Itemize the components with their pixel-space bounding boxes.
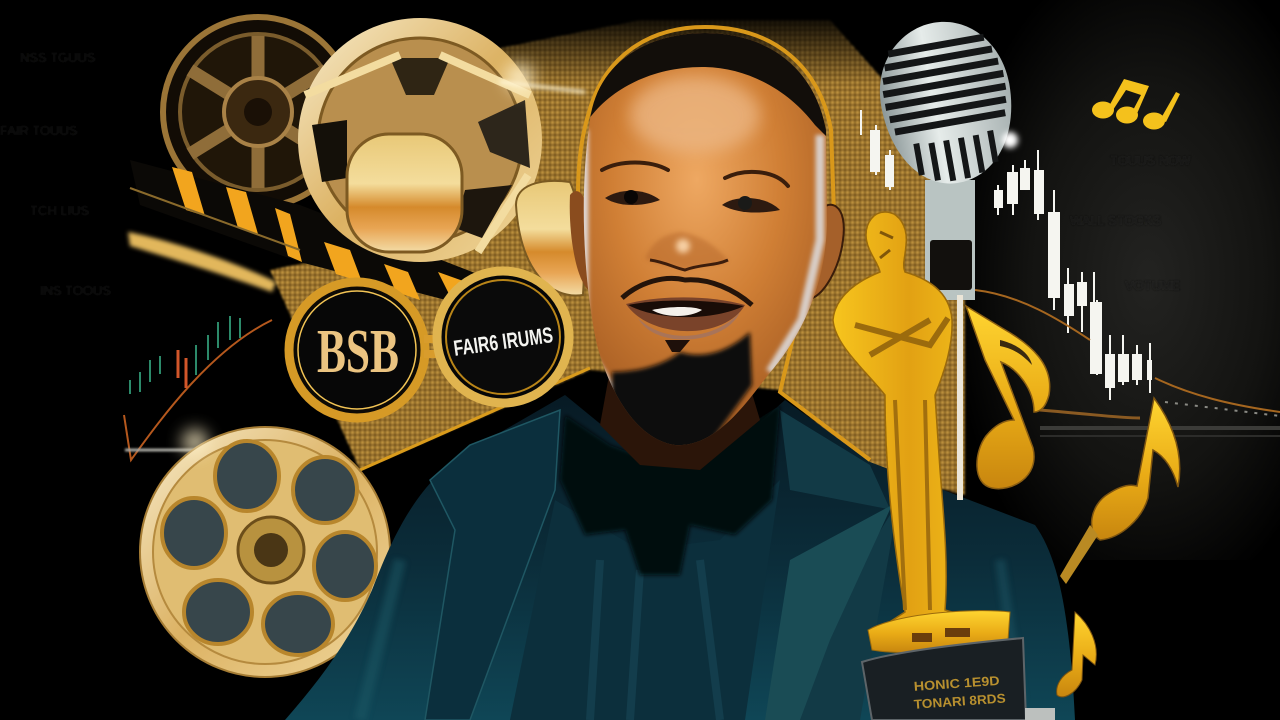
badge: BSB: BSB: [317, 318, 399, 386]
figure: moustache and mouth: [622, 278, 752, 352]
figure: eyebrows: [602, 162, 788, 186]
award statuette: [833, 212, 985, 635]
connector between badges: [424, 335, 438, 358]
icon: small music notes: [1092, 79, 1180, 130]
ghost text: faint market labels: [0, 50, 1191, 298]
figure: gold head outline: [578, 27, 870, 460]
badge: BSB: [289, 282, 425, 418]
gold film reel with lens: [298, 18, 585, 296]
figure: bow tie: [560, 405, 780, 575]
small candlestick chart, left: [124, 316, 272, 460]
ghost text: faint market labels: NSS TGUUS: [20, 50, 96, 65]
ghost text: faint market labels: TOUUS NOW: [1110, 153, 1191, 168]
figure: face: [584, 33, 827, 446]
microphone: [869, 12, 1025, 500]
ghost text: faint market labels: FAIR TOUUS: [0, 123, 78, 138]
dark film reel, top left: [163, 17, 353, 207]
ghost text: faint market labels: TCH LIUS: [30, 203, 90, 218]
badge: film text: [437, 271, 569, 403]
figure: ears: [570, 191, 844, 300]
candlestick chart, right: [861, 110, 1152, 400]
award base: [862, 611, 1055, 720]
award base: HONIC 1E9D: [913, 673, 1000, 694]
ghost text: faint market labels: VOTUME: [1125, 278, 1181, 293]
badge: film text: FAIR6 IRUMS: [452, 322, 554, 361]
background: dark vignette panel: [950, 0, 1280, 560]
figure: suit jacket: [285, 395, 1075, 720]
clapperboard stripe band: [130, 160, 480, 305]
background: gold halftone field: [270, 15, 965, 495]
light streak: [128, 232, 276, 292]
figure: neck: [600, 370, 760, 470]
gold music note, bottom: [1057, 612, 1096, 697]
trend lines, right: [975, 290, 1280, 436]
figure: eyes: [605, 190, 780, 213]
ghost text: faint market labels: INS TOOUS: [40, 283, 111, 298]
award base: TONARI 8RDS: [913, 690, 1006, 712]
large gold music note: [966, 306, 1050, 489]
figure: nose: [645, 232, 728, 270]
large gold film reel: [140, 427, 390, 677]
ghost text: faint market labels: WALL STOCKS: [1070, 213, 1162, 228]
gold music note, lower right: [1060, 398, 1180, 584]
